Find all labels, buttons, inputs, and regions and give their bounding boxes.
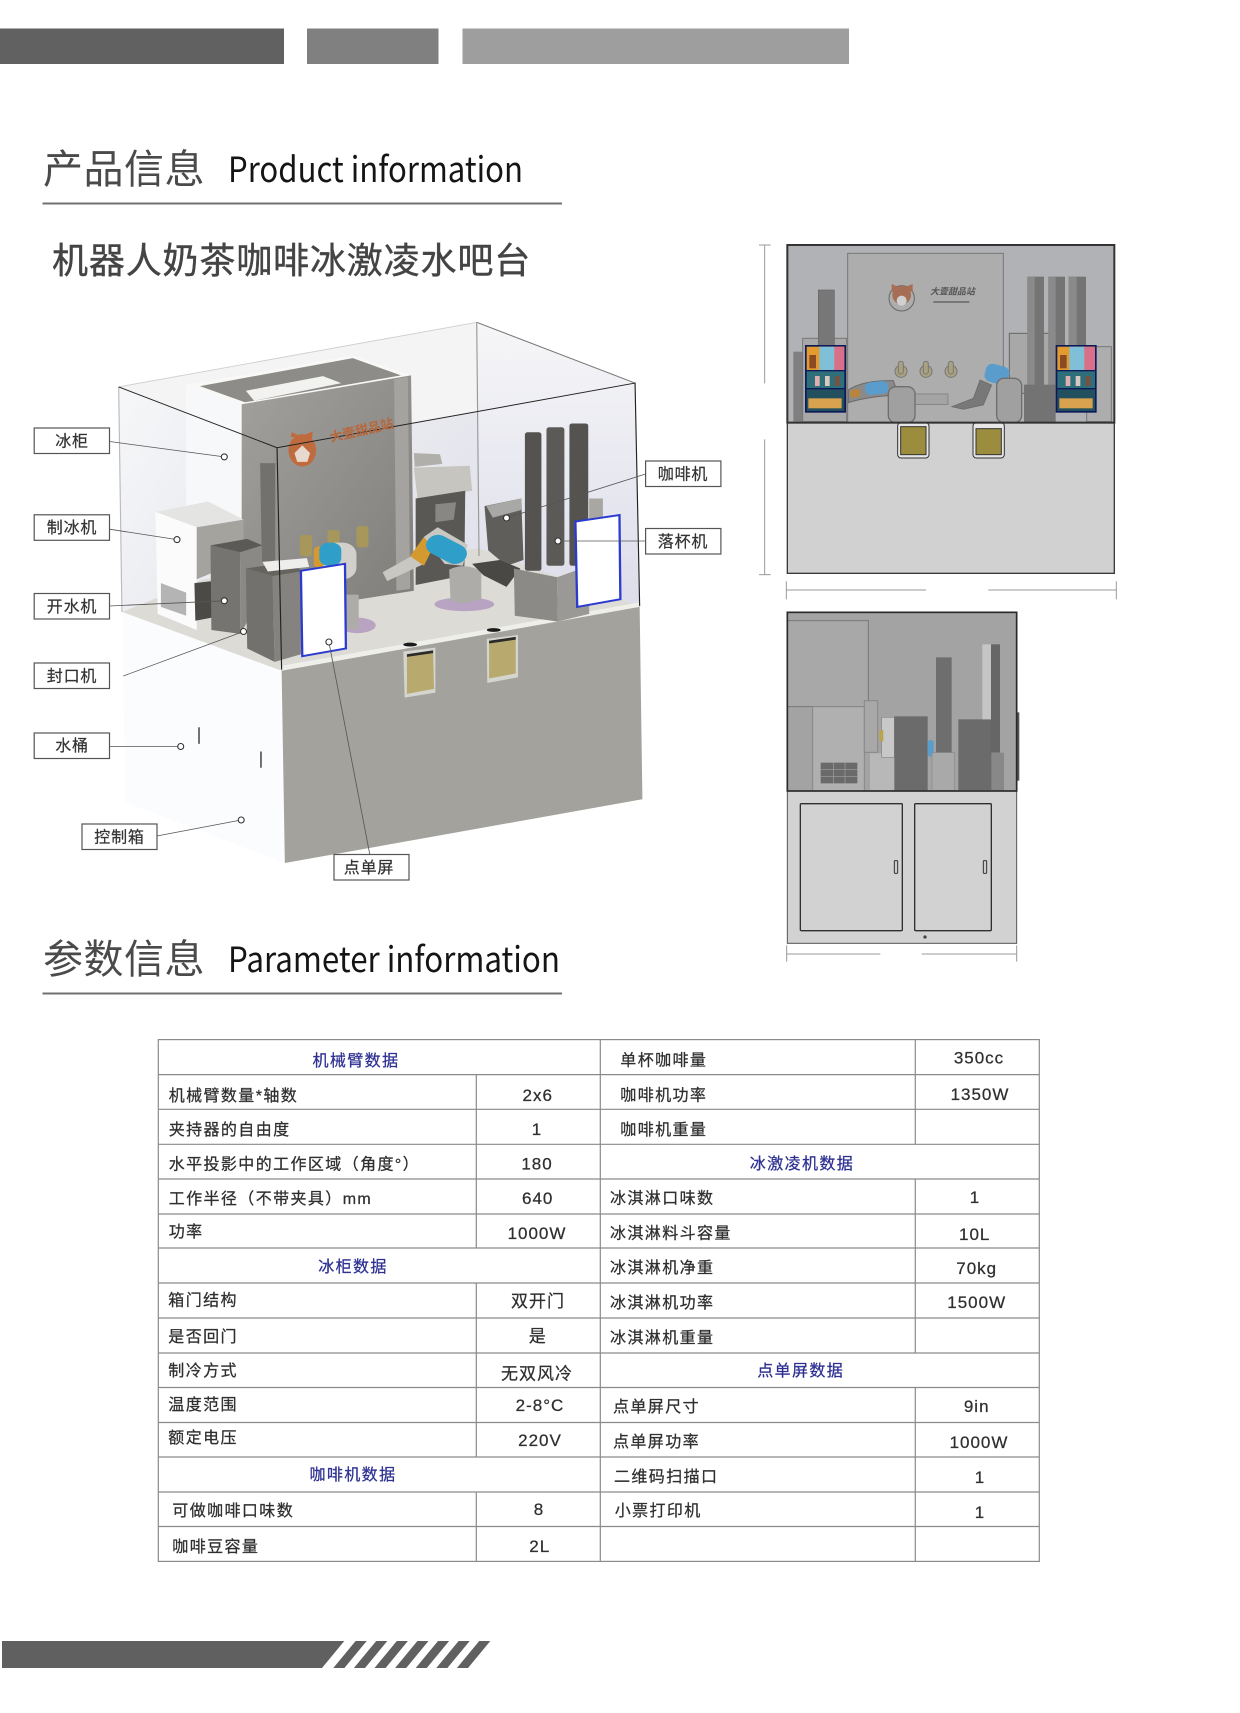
sealing machine <box>246 558 309 662</box>
table left column: 1 <box>532 1120 542 1139</box>
callout: 咖啡机: 咖啡机 <box>658 466 708 484</box>
table left column: 2L <box>529 1537 550 1556</box>
cabinet door handles <box>199 727 261 768</box>
cup dispenser <box>514 423 603 622</box>
callout: 控制箱 <box>82 824 157 850</box>
side view dispenser <box>932 657 954 790</box>
table right column: 1 <box>970 1188 980 1207</box>
table right column: 1000W <box>950 1433 1008 1452</box>
callout: 开水机 <box>34 594 110 619</box>
table left column: 是 <box>529 1327 547 1346</box>
table right column: 1 <box>975 1468 985 1487</box>
water boiler <box>210 539 262 634</box>
table left column: 水平投影中的工作区域（角度°） <box>169 1155 420 1173</box>
callout: 落杯机: 落杯机 <box>658 533 708 551</box>
table right column: 冰淇淋机净重 <box>610 1259 714 1277</box>
front view pickup window 1 <box>898 423 929 458</box>
gold dispensers on tower <box>300 526 368 556</box>
leader lines and dots <box>110 442 646 854</box>
table right column: 冰淇淋料斗容量 <box>610 1224 732 1242</box>
glass edge lines <box>119 322 640 670</box>
table left column: 180 <box>521 1154 553 1173</box>
table left column: 机械臂数量*轴数 <box>169 1087 298 1105</box>
front view upper cabin <box>787 245 1114 423</box>
callout: 点单屏: 点单屏 <box>344 859 394 877</box>
callout: 封口机 <box>34 663 110 688</box>
heading: parameter information: 参数信息 <box>43 938 205 982</box>
table right column: 冰淇淋口味数 <box>610 1189 714 1207</box>
heading: product information <box>42 142 562 204</box>
front view pickup window 2 <box>973 423 1004 458</box>
table left column: 功率 <box>169 1223 204 1241</box>
table left column: 制冷方式 <box>168 1362 238 1380</box>
front elevation view <box>759 245 1116 599</box>
front view right menu screen <box>1056 345 1097 413</box>
front pickup window 1 <box>403 643 435 698</box>
heading: parameter information: Parameter information <box>228 932 560 983</box>
table left column: 双开门 <box>511 1292 565 1311</box>
table right column: 冰淇淋机重量 <box>610 1329 714 1347</box>
table right column: 9in <box>964 1397 990 1416</box>
cabinet front grey face <box>282 607 642 863</box>
table left column: 2-8°C <box>516 1396 564 1415</box>
front view width dimension <box>786 581 1116 599</box>
table right column: 咖啡机重量 <box>620 1121 707 1139</box>
logo text on tower: 大壹甜品站 <box>328 416 395 445</box>
side view sealer block <box>894 716 928 790</box>
side view door left <box>800 804 902 931</box>
front view right robot <box>952 362 1022 423</box>
top decorative bars <box>0 28 849 64</box>
table right column: 小票打印机 <box>615 1502 702 1520</box>
table left column: 额定电压 <box>168 1429 238 1447</box>
ice cream machine <box>414 453 472 585</box>
heading: parameter information <box>42 932 562 994</box>
ordering screen left <box>301 564 346 656</box>
front view left menu screen <box>805 345 846 413</box>
callout: 水桶: 水桶 <box>55 737 89 755</box>
side view blue arm <box>928 740 934 757</box>
callout: 制冰机 <box>34 515 110 540</box>
front view cup dispensers <box>1024 277 1086 423</box>
front view tower panel: 大壹甜品站 <box>930 287 977 297</box>
callout: 控制箱: 控制箱 <box>94 828 145 846</box>
front view lower cabinet <box>787 423 1114 573</box>
decorative arm rail near tower <box>260 463 275 564</box>
table right column: 点单屏数据 <box>757 1362 844 1380</box>
table right column: 1350W <box>951 1085 1009 1104</box>
side view freezer <box>787 621 868 707</box>
callout: 封口机: 封口机 <box>47 668 97 686</box>
side view lower cabinet <box>787 791 1017 943</box>
table left column: 220V <box>518 1431 562 1450</box>
callout: 落杯机 <box>646 528 721 554</box>
callout: 开水机: 开水机 <box>47 598 97 616</box>
right robot arm <box>383 527 494 611</box>
cabinet left white face <box>122 612 285 863</box>
table grid <box>158 1040 1039 1561</box>
coffee machine <box>472 498 524 587</box>
table left column: 无双风冷 <box>501 1364 573 1383</box>
side view upper cabin <box>787 612 1017 791</box>
table right column: 点单屏功率 <box>613 1433 700 1451</box>
front view height dimension <box>759 245 771 575</box>
table left column: 夹持器的自由度 <box>169 1121 291 1139</box>
side view door right <box>915 804 991 931</box>
side elevation view <box>787 612 1019 962</box>
side view width dimension <box>787 945 1017 962</box>
table left column: 咖啡机数据 <box>309 1466 397 1484</box>
front pickup window 2 <box>487 628 518 683</box>
callout: 点单屏 <box>334 854 409 880</box>
callout: 咖啡机 <box>646 461 721 486</box>
icon: orange logo on tower <box>289 432 316 467</box>
table right column: 咖啡机功率 <box>620 1086 707 1104</box>
table left column: 工作半径（不带夹具）mm <box>169 1190 372 1208</box>
table right column: 1500W <box>947 1293 1006 1312</box>
heading: product information: Product information <box>228 142 523 193</box>
table left column: 8 <box>534 1500 544 1519</box>
glass enclosure back <box>119 322 640 670</box>
parameter table <box>158 1040 1039 1561</box>
front view control panel <box>907 394 948 405</box>
callout: 冰柜 <box>34 428 110 454</box>
callout: 水桶 <box>34 733 110 758</box>
table left column: 温度范围 <box>168 1396 238 1414</box>
table right column: 350cc <box>954 1048 1004 1067</box>
footer hazard stripe bar <box>2 1641 490 1668</box>
table left column: 可做咖啡口味数 <box>172 1502 294 1520</box>
table right column: 70kg <box>956 1259 997 1278</box>
ice maker <box>155 502 244 630</box>
table right column: 二维码扫描口 <box>614 1468 718 1486</box>
table right column: 点单屏尺寸 <box>613 1398 700 1416</box>
counter front edge highlight <box>282 602 640 672</box>
side view ice maker <box>813 701 878 791</box>
side view boiler block <box>958 644 1004 790</box>
table right column: 10L <box>959 1225 990 1244</box>
table left column: 咖啡豆容量 <box>172 1538 259 1556</box>
table right column: 单杯咖啡量 <box>620 1051 707 1069</box>
table left column: 1000W <box>508 1224 566 1243</box>
table left column: 机械臂数据 <box>312 1052 400 1070</box>
product title: 机器人奶茶咖啡冰激凌水吧台 <box>52 240 531 281</box>
left robot arm <box>314 543 376 633</box>
table left column <box>168 1052 573 1556</box>
table right column: 冰激凌机数据 <box>750 1155 854 1173</box>
callout: 冰柜: 冰柜 <box>55 432 89 450</box>
table left column: 2x6 <box>522 1086 553 1105</box>
table right column: 1 <box>975 1503 985 1522</box>
freezer tower <box>186 355 414 618</box>
front view gold taps <box>895 361 957 377</box>
table left column: 是否回门 <box>168 1328 238 1346</box>
counter top <box>122 548 640 672</box>
callout: 制冰机: 制冰机 <box>47 519 97 537</box>
front view outlines <box>787 245 1114 573</box>
3D isometric illustration of the robot bar <box>119 322 642 863</box>
front view left robot <box>848 380 915 423</box>
table right column: 冰淇淋机功率 <box>610 1294 714 1312</box>
side view mechanism <box>870 717 895 790</box>
front view tower panel <box>848 253 1003 423</box>
side view screen edge <box>1017 712 1019 781</box>
table left column: 640 <box>522 1189 553 1208</box>
side view outlines <box>787 612 1017 943</box>
table right column <box>610 1048 1009 1522</box>
table left column: 箱门结构 <box>168 1291 238 1309</box>
heading: product information: 产品信息 <box>43 148 205 192</box>
ordering screen right <box>575 515 620 607</box>
table left column: 冰柜数据 <box>318 1258 388 1276</box>
